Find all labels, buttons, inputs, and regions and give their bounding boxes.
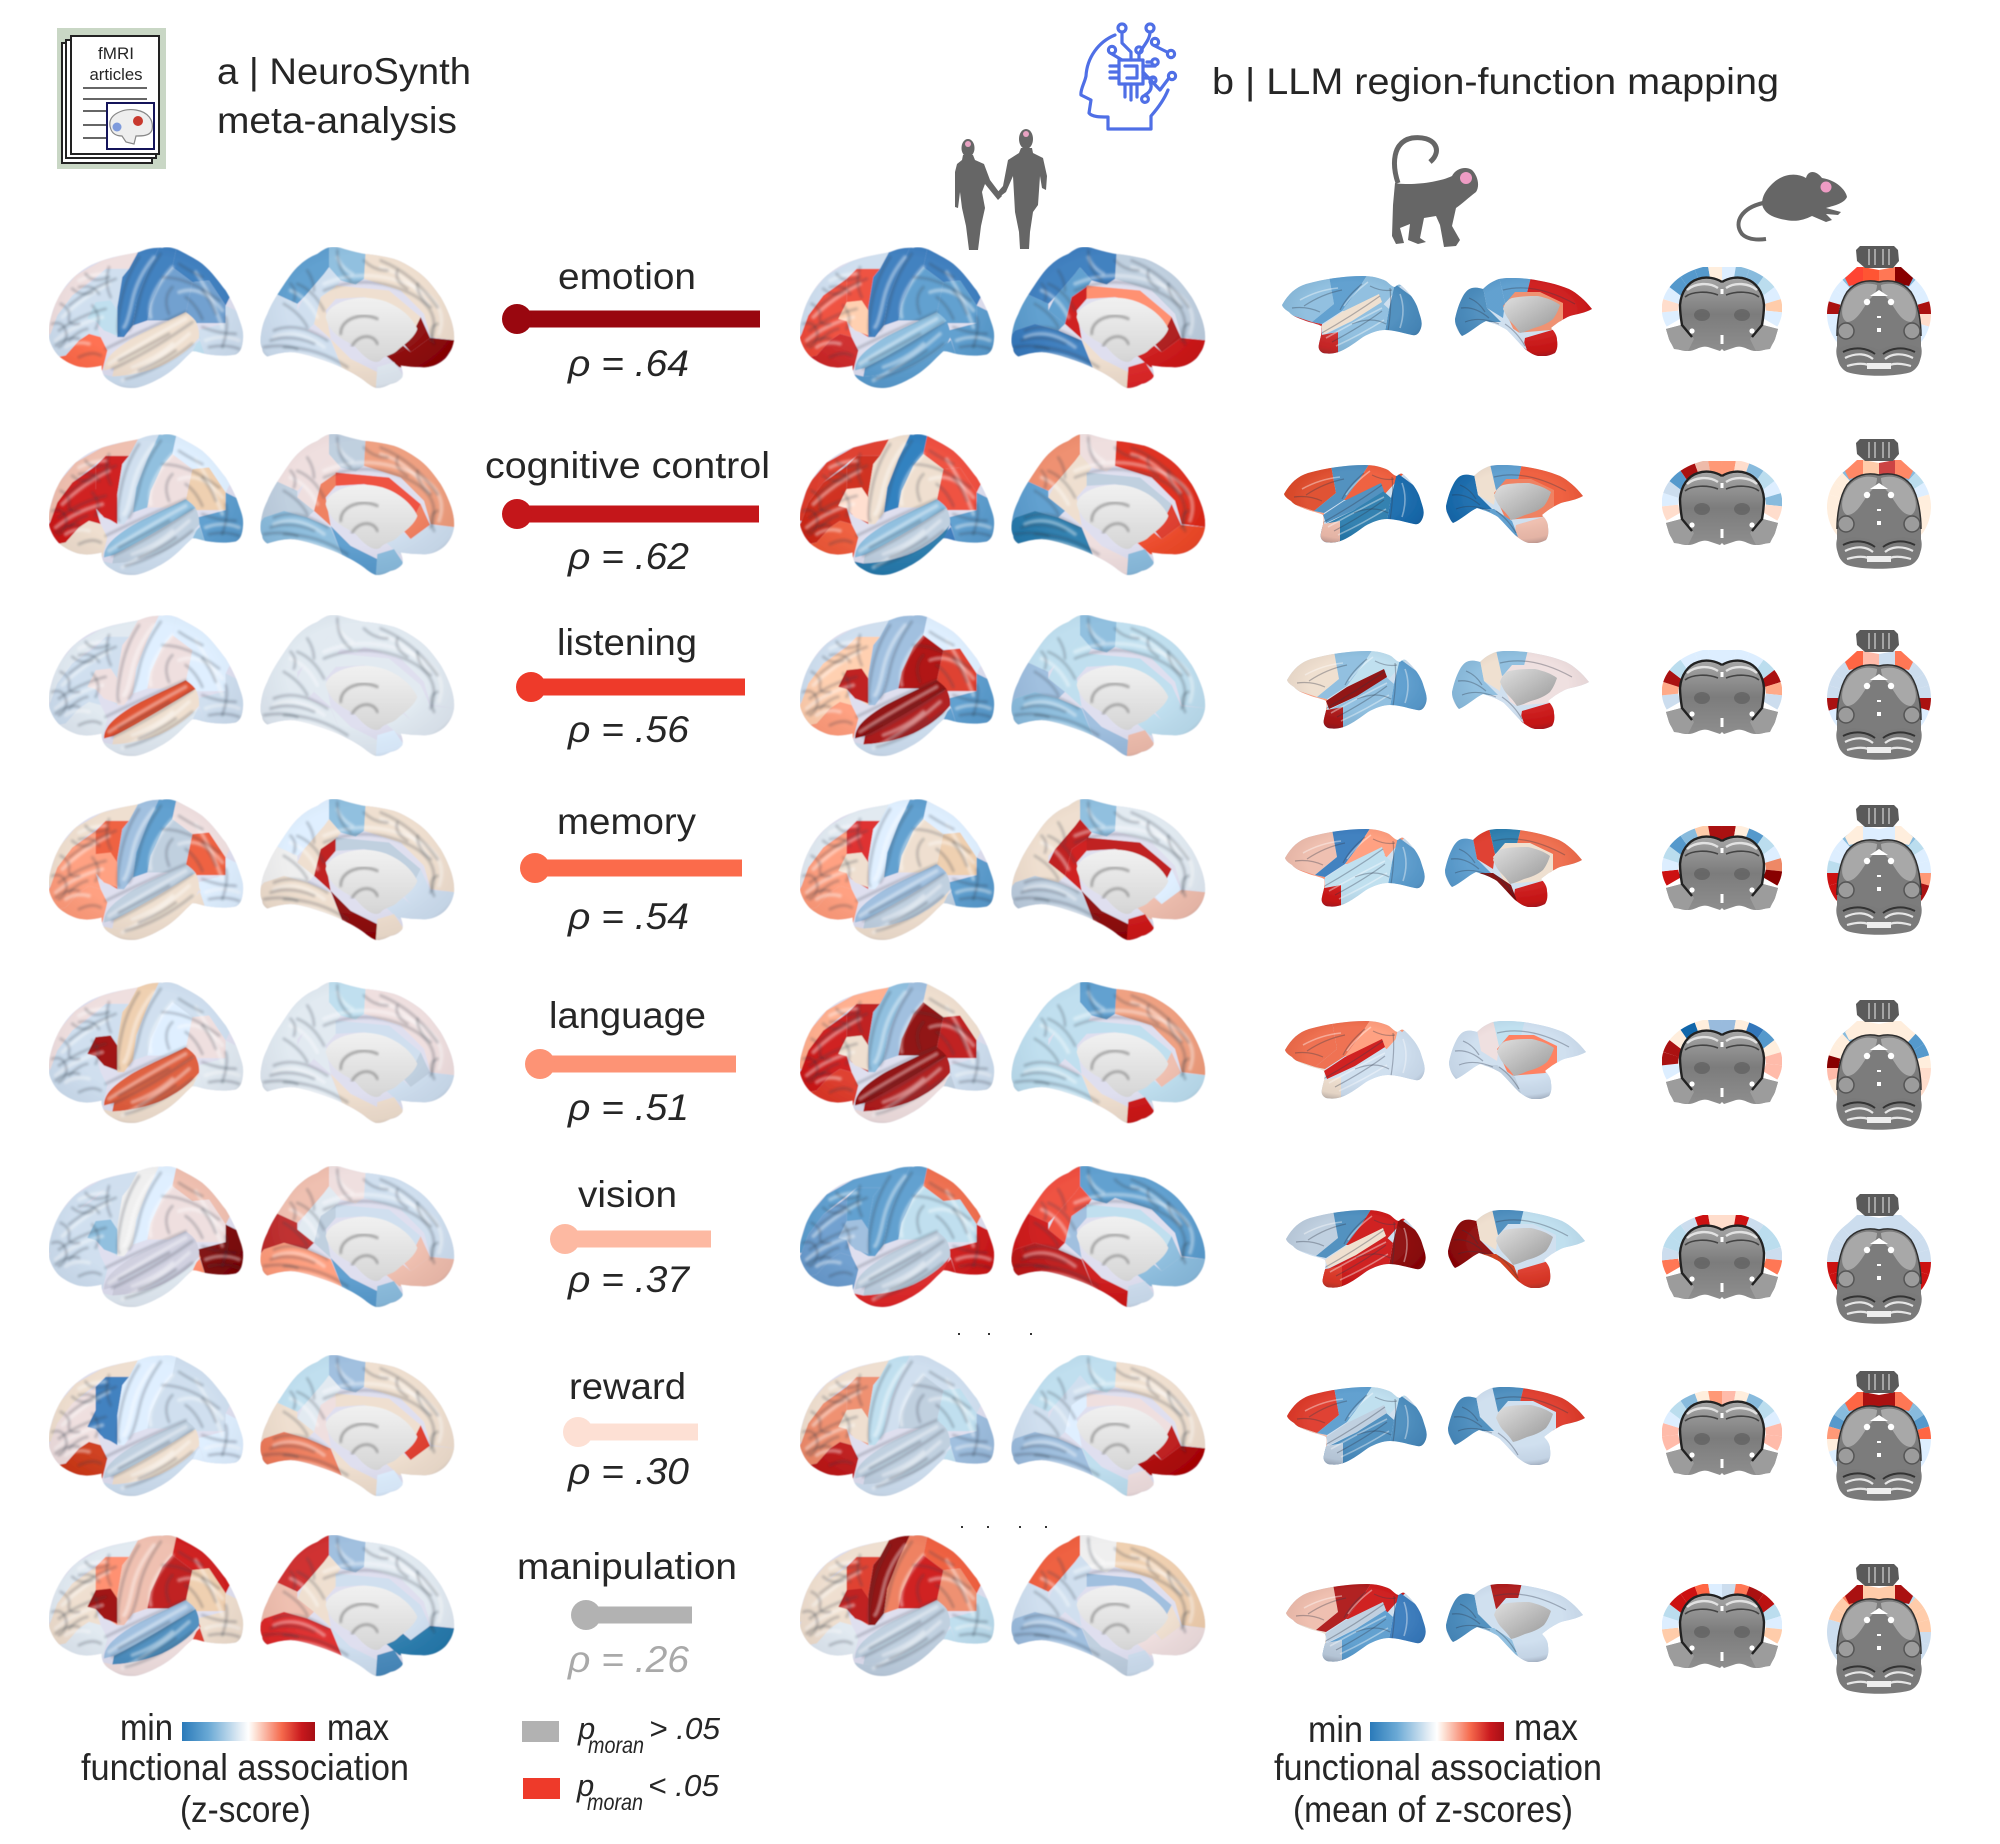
brain a lateral: manipulation	[42, 1532, 249, 1682]
legend a: colour scale z-score: functional association	[81, 1747, 409, 1788]
macaque lateral: manipulation	[1284, 1582, 1430, 1664]
mouse coronal: manipulation	[1666, 1590, 1778, 1668]
brain a lateral: language	[42, 979, 249, 1129]
macaque medial: memory	[1443, 828, 1585, 909]
brain b lateral: memory	[793, 796, 1000, 946]
lollipop: emotion: emotion	[558, 256, 696, 297]
legend b: colour scale mean of z-scores: functional association	[1274, 1747, 1602, 1788]
lollipop: manipulation, not significant: ρ = .26	[567, 1639, 689, 1680]
macaque medial: listening	[1450, 650, 1592, 731]
legend: significance: moran	[588, 1732, 644, 1758]
mouse horizontal: manipulation	[1833, 1564, 1925, 1694]
icon: fMRI articles stack	[57, 28, 166, 169]
mouse horizontal: memory	[1833, 805, 1925, 935]
lollipop: vision: ρ = .37	[567, 1259, 690, 1300]
legend b: colour scale mean of z-scores	[1274, 1707, 1602, 1830]
macaque lateral: cognitive control	[1282, 463, 1428, 545]
heading b: b | LLM region-function mapping	[1212, 61, 1779, 102]
lollipop: language: language	[549, 995, 706, 1036]
brain b medial: emotion	[1005, 244, 1212, 394]
brain a lateral: listening	[42, 612, 249, 762]
mouse coronal: language	[1666, 1026, 1778, 1104]
macaque medial: manipulation	[1444, 1583, 1586, 1664]
macaque lateral: emotion	[1280, 274, 1426, 356]
row: manipulation	[42, 1532, 1925, 1694]
brain b medial: reward	[1005, 1352, 1212, 1502]
row: cognitive control	[42, 431, 1925, 581]
brain b lateral: manipulation	[793, 1532, 1000, 1682]
mouse coronal: reward	[1666, 1397, 1778, 1475]
lollipop: language	[525, 995, 736, 1128]
brain a medial: language	[254, 979, 461, 1129]
legend a: colour scale z-score: max	[327, 1707, 389, 1748]
brain b medial: language	[1005, 979, 1212, 1129]
lollipop: reward	[563, 1366, 698, 1492]
lollipop: listening: listening	[557, 622, 697, 663]
macaque lateral: vision	[1284, 1208, 1430, 1290]
brain a medial: emotion	[254, 244, 461, 394]
brain a lateral: reward	[42, 1352, 249, 1502]
lollipop: reward: ρ = .30	[567, 1451, 689, 1492]
brain b medial: listening	[1005, 612, 1212, 762]
macaque medial: cognitive control	[1444, 464, 1586, 545]
legend a: colour scale z-score: min	[120, 1707, 173, 1748]
brain b lateral: vision	[793, 1163, 1000, 1313]
macaque medial: reward	[1446, 1386, 1588, 1467]
legend: significance: > .05	[649, 1711, 721, 1746]
row: language	[42, 979, 1925, 1130]
icon: mouse silhouette	[1739, 172, 1847, 239]
macaque medial: language	[1447, 1020, 1589, 1101]
lollipop: manipulation, not significant	[517, 1546, 737, 1680]
brain b lateral: language	[793, 979, 1000, 1129]
mouse horizontal: reward	[1833, 1371, 1925, 1501]
icon: fMRI articles stack: fMRI	[98, 44, 134, 63]
mouse coronal: listening	[1666, 656, 1778, 734]
legend: significance: p	[577, 1711, 595, 1746]
brain a lateral: emotion	[42, 244, 249, 394]
lollipop: emotion: ρ = .64	[567, 343, 689, 384]
icon: fMRI articles stack: articles	[90, 65, 142, 84]
panel header b: LLM	[1081, 24, 1779, 129]
lollipop: cognitive control: ρ = .62	[567, 536, 689, 577]
macaque lateral: language	[1283, 1019, 1429, 1101]
heading a: a | NeuroSynth	[217, 51, 471, 92]
lollipop: memory: memory	[557, 801, 697, 842]
mouse horizontal: language	[1833, 1000, 1925, 1130]
legend: significance: < .05	[648, 1768, 720, 1803]
panel header a: NeuroSynth	[57, 28, 471, 169]
lollipop: vision: vision	[578, 1174, 677, 1215]
heading a: meta-analysis	[217, 100, 457, 141]
lollipop: reward: reward	[569, 1366, 686, 1407]
brain a lateral: cognitive control	[42, 431, 249, 581]
brain b lateral: listening	[793, 612, 1000, 762]
mouse horizontal: cognitive control	[1833, 439, 1925, 569]
lollipop: memory	[520, 801, 742, 937]
legend: significance: p	[576, 1768, 594, 1803]
brain a medial: listening	[254, 612, 461, 762]
legend b: colour scale mean of z-scores: min	[1308, 1709, 1363, 1750]
mouse coronal: vision	[1666, 1221, 1778, 1299]
brain b medial: vision	[1005, 1163, 1212, 1313]
row: vision	[42, 1163, 1925, 1324]
lollipop: memory: ρ = .54	[567, 896, 689, 937]
brain b medial: manipulation	[1005, 1532, 1212, 1682]
macaque medial: emotion	[1453, 277, 1595, 358]
lollipop: manipulation, not significant: manipulation	[517, 1546, 737, 1587]
legend a: colour scale z-score: (z-score)	[180, 1789, 311, 1830]
icon: AI head with chip	[1081, 24, 1176, 129]
lollipop: emotion	[502, 256, 760, 384]
brain a lateral: memory	[42, 796, 249, 946]
macaque medial: vision	[1446, 1209, 1588, 1290]
macaque lateral: memory	[1283, 827, 1429, 909]
brain b lateral: cognitive control	[793, 431, 1000, 581]
legend a: colour scale z-score	[81, 1707, 409, 1830]
lollipop: cognitive control	[485, 445, 770, 577]
mouse horizontal: listening	[1833, 630, 1925, 760]
macaque lateral: listening	[1285, 649, 1431, 731]
brain b medial: cognitive control	[1005, 431, 1212, 581]
legend b: colour scale mean of z-scores: (mean of z-scores)	[1293, 1789, 1573, 1830]
brain a medial: memory	[254, 796, 461, 946]
brain a medial: vision	[254, 1163, 461, 1313]
lollipop: cognitive control: cognitive control	[485, 445, 770, 486]
heading a	[217, 51, 471, 141]
brain a medial: cognitive control	[254, 431, 461, 581]
mouse horizontal: vision	[1833, 1194, 1925, 1324]
row: emotion	[42, 244, 1925, 394]
legend b: colour scale mean of z-scores: max	[1514, 1707, 1578, 1748]
row: reward	[42, 1352, 1925, 1502]
mouse coronal: memory	[1666, 832, 1778, 910]
lollipop: listening: ρ = .56	[567, 709, 689, 750]
lollipop: listening	[516, 622, 745, 750]
icon: macaque silhouette	[1392, 138, 1478, 247]
row: listening	[42, 612, 1925, 762]
legend: significance: moran	[587, 1789, 643, 1815]
mouse horizontal: emotion	[1833, 246, 1925, 376]
icon: human couple silhouette	[955, 129, 1047, 250]
brain b lateral: emotion	[793, 244, 1000, 394]
brain b lateral: reward	[793, 1352, 1000, 1502]
brain b medial: memory	[1005, 796, 1212, 946]
lollipop: language: ρ = .51	[567, 1087, 689, 1128]
lollipop: vision	[550, 1174, 711, 1300]
macaque lateral: reward	[1285, 1385, 1431, 1467]
mouse coronal: emotion	[1666, 273, 1778, 351]
row: memory	[42, 796, 1925, 946]
brain a medial: manipulation	[254, 1532, 461, 1682]
brain a lateral: vision	[42, 1163, 249, 1313]
mouse coronal: cognitive control	[1666, 467, 1778, 545]
brain a medial: reward	[254, 1352, 461, 1502]
legend: significance	[522, 1711, 721, 1815]
